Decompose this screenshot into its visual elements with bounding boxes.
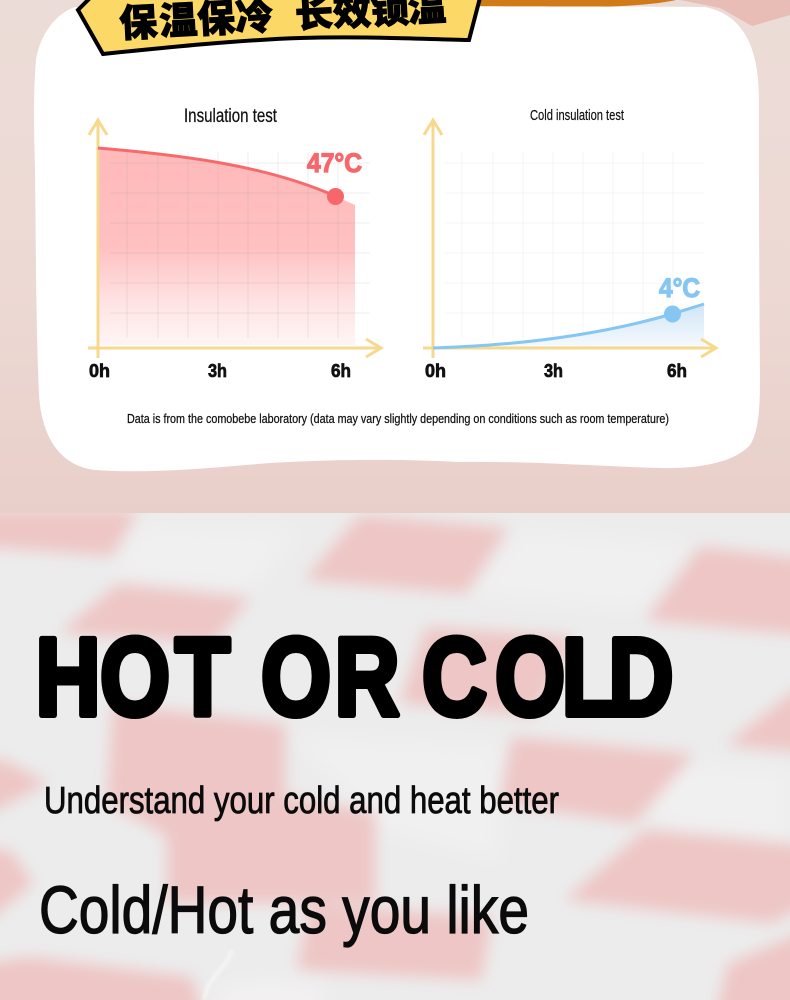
lower background: blurred checkered tablecloth	[0, 505, 790, 1000]
footnote: Data is from the comobebe laboratory (data may vary slightly depending on conditions such as room temperature)	[127, 411, 669, 426]
banner: yellow title label	[78, 0, 481, 54]
steam wisp	[202, 986, 209, 1000]
chart: cold insulation test	[423, 107, 716, 381]
cold curve area	[433, 304, 704, 348]
chart title: Insulation test	[184, 106, 278, 127]
heat curve	[98, 148, 335, 196]
end point marker	[664, 306, 681, 322]
orange product edge at top	[470, 0, 676, 8]
end point marker	[327, 188, 344, 205]
axis labels	[425, 361, 687, 381]
axes	[423, 120, 716, 358]
axis labels: 3h	[208, 361, 227, 381]
main heading: HOT OR COLD	[36, 617, 674, 739]
heat curve area	[98, 148, 355, 345]
upper background	[0, 0, 790, 513]
axis labels: 6h	[331, 361, 351, 381]
axis labels: 0h	[425, 361, 446, 381]
axes	[88, 120, 381, 358]
tagline: Cold/Hot as you like	[39, 873, 529, 948]
value label: 4°C	[659, 273, 700, 303]
cold curve	[433, 304, 704, 348]
axis labels: 3h	[544, 361, 563, 381]
chart title: Cold insulation test	[530, 107, 625, 124]
axis labels: 0h	[89, 361, 110, 381]
axis labels	[89, 361, 351, 381]
chart: insulation test	[88, 106, 381, 381]
value label: 47°C	[307, 148, 362, 178]
axis labels: 6h	[667, 361, 687, 381]
subheading: Understand your cold and heat better	[44, 780, 559, 822]
panel: white chart card	[34, 6, 760, 471]
